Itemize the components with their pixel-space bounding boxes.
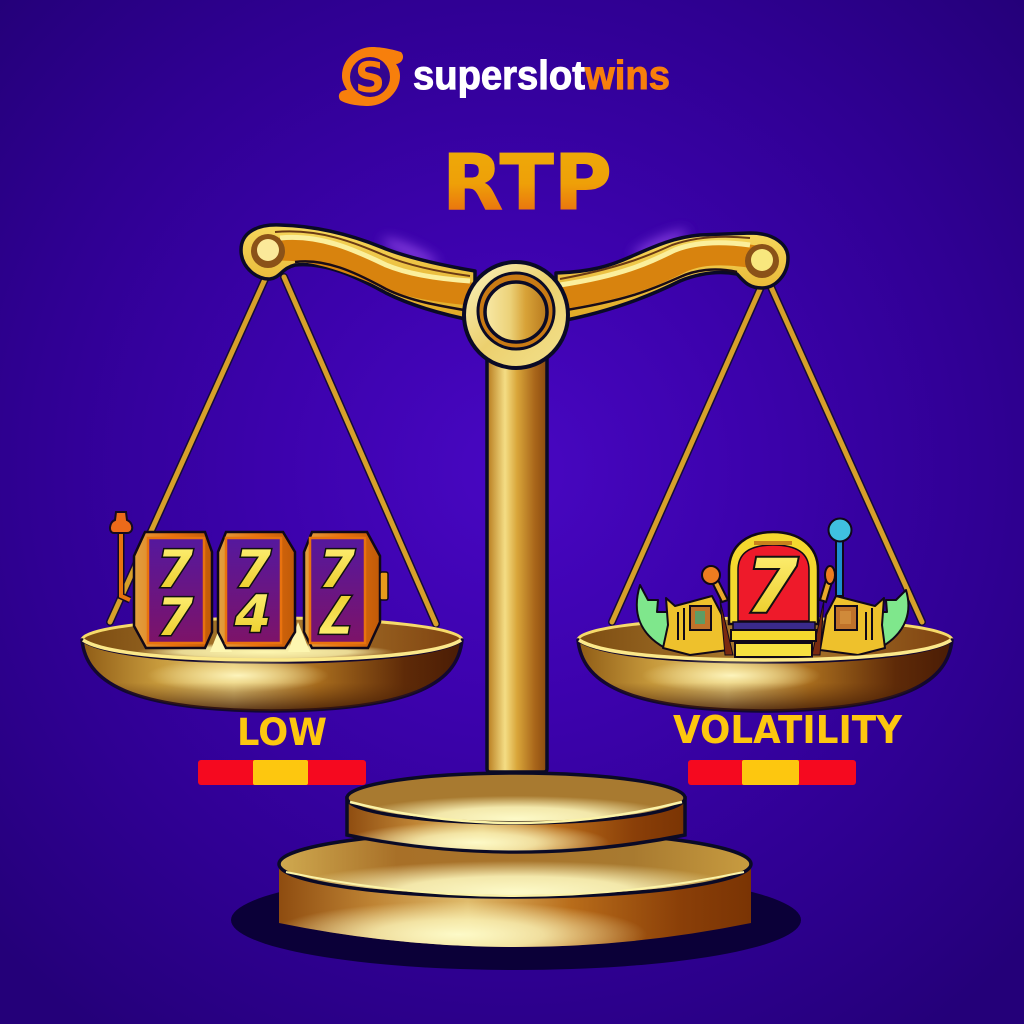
label: VOLATILITY: VOLATILITY: [673, 708, 902, 752]
title: RTP: RTP: [442, 139, 612, 228]
low meter bar: [198, 760, 366, 785]
right pan chains: [612, 287, 922, 622]
logo wordmark: superslot: [413, 52, 585, 98]
green wings: [637, 585, 908, 648]
upper tier: [347, 773, 685, 852]
right cabinet: [812, 596, 885, 655]
reel 1: [134, 532, 212, 648]
central cabinet: 7: [746, 544, 798, 630]
label: LOW: LOW: [237, 711, 327, 754]
blue lever: [828, 518, 852, 596]
floor glow: [135, 643, 395, 661]
logo: [339, 47, 670, 106]
base shadow: [231, 870, 801, 970]
jackpot machine: [637, 518, 908, 657]
beam left arm: [241, 225, 475, 321]
reel 3: 7: [319, 540, 356, 600]
left cabinet: [663, 596, 733, 655]
left pan bowl: [82, 640, 462, 711]
reel 3: [304, 532, 388, 648]
logo wordmark: wins: [584, 52, 670, 98]
glow between reels: [210, 622, 310, 652]
central cabinet: [729, 532, 818, 657]
reel 3: 7: [318, 583, 355, 643]
beam right arm: [556, 233, 788, 322]
left pan chains: [110, 277, 436, 624]
reel 2: [218, 532, 295, 648]
scale: [110, 225, 922, 970]
right pan: [578, 518, 952, 711]
pivot medallion: [464, 262, 568, 368]
right pan inner: [578, 618, 952, 662]
orange side handles: [702, 566, 835, 602]
reel 1: 7: [157, 540, 194, 600]
reel 2: 7: [235, 540, 272, 600]
central post: [487, 355, 547, 772]
logo icon: [339, 47, 403, 106]
left pan inner: [82, 618, 462, 662]
beam: [241, 225, 788, 368]
base: [279, 773, 751, 947]
beam glow: [380, 226, 690, 270]
lower tier: [279, 831, 751, 947]
reel 1: 7: [157, 588, 194, 648]
volatility meter bar: [688, 760, 856, 785]
slot reels: [110, 512, 388, 652]
left pan: [82, 512, 462, 711]
logo icon: S: [355, 53, 385, 102]
reel 2: 4: [234, 585, 271, 645]
lever: [110, 512, 132, 600]
right pan bowl: [578, 640, 952, 711]
